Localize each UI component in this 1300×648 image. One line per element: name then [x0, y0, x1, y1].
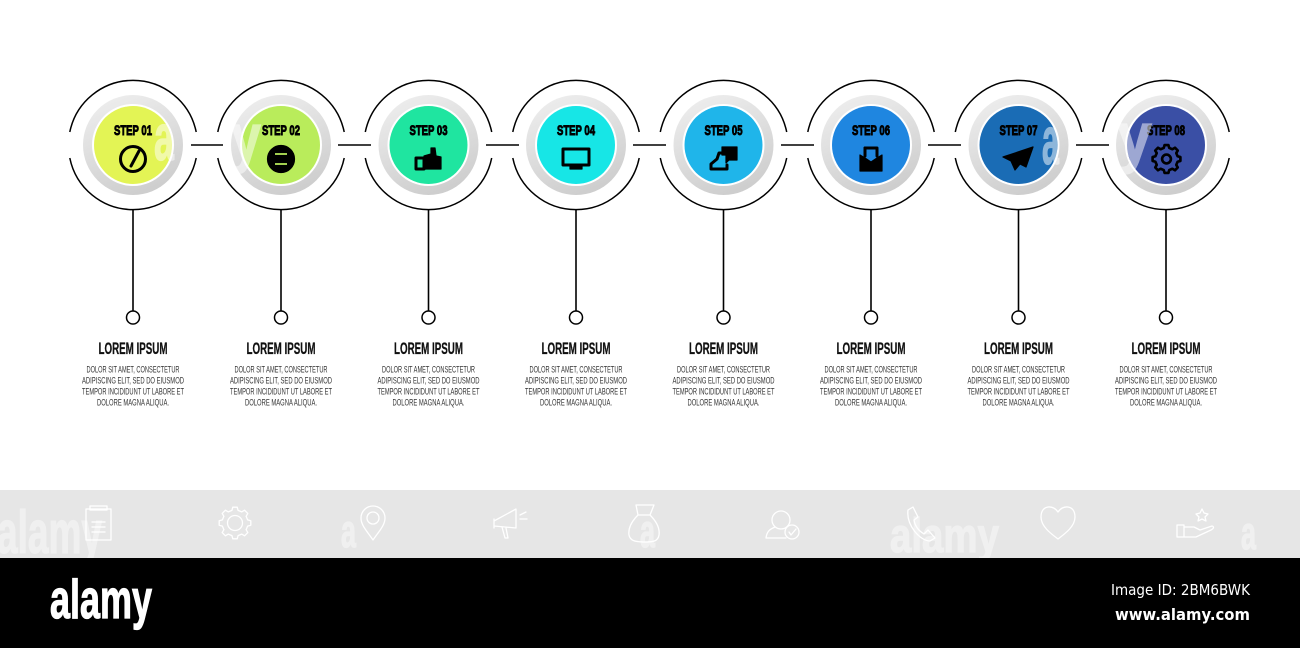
icon: location pin	[361, 506, 385, 540]
step 2	[218, 80, 344, 408]
text 7: TEMPOR INCIDIDUNT UT LABORE ET	[968, 386, 1070, 396]
text 4: ADIPISCING ELIT, SED DO EIUSMOD	[525, 376, 627, 386]
icon: gear	[1153, 145, 1180, 173]
title 5: LOREM IPSUM	[689, 340, 758, 358]
watermark over steps: a	[154, 100, 175, 174]
text 6: DOLORE MAGNA ALIQUA.	[835, 398, 907, 408]
text 3: DOLORE MAGNA ALIQUA.	[392, 398, 464, 408]
icon: user chat	[711, 147, 737, 169]
icon: money bag	[629, 505, 659, 542]
text 1: TEMPOR INCIDIDUNT UT LABORE ET	[82, 386, 184, 396]
band icons	[86, 505, 1214, 542]
text 3	[378, 364, 480, 408]
text 4	[525, 364, 627, 408]
text 7	[968, 364, 1070, 408]
text 1: DOLOR SIT AMET, CONSECTETUR	[86, 364, 180, 374]
text 1: DOLORE MAGNA ALIQUA.	[97, 398, 169, 408]
icon: phone	[908, 507, 935, 541]
icon: thumbs up	[416, 148, 441, 169]
step 5: STEP 05	[704, 122, 743, 138]
website: www.alamy.com	[1115, 605, 1250, 624]
step 8	[1103, 80, 1229, 408]
watermark over steps: y	[1117, 99, 1152, 175]
text 5: DOLORE MAGNA ALIQUA.	[688, 398, 760, 408]
icon: megaphone	[494, 509, 527, 538]
watermark over steps: a	[1042, 103, 1060, 179]
text 2: ADIPISCING ELIT, SED DO EIUSMOD	[230, 376, 332, 386]
text 6: ADIPISCING ELIT, SED DO EIUSMOD	[820, 376, 922, 386]
alamy logo: alamy	[50, 568, 152, 630]
connector lines	[191, 144, 1109, 146]
text 3: DOLOR SIT AMET, CONSECTETUR	[382, 364, 475, 374]
icon: paper plane	[1003, 147, 1033, 170]
step 6	[808, 80, 934, 408]
text 8: ADIPISCING ELIT, SED DO EIUSMOD	[1115, 376, 1217, 386]
text 4: DOLORE MAGNA ALIQUA.	[540, 398, 612, 408]
text 2: TEMPOR INCIDIDUNT UT LABORE ET	[230, 386, 332, 396]
step 7	[955, 80, 1082, 408]
text 5: ADIPISCING ELIT, SED DO EIUSMOD	[672, 376, 775, 386]
icon: user check	[766, 511, 799, 539]
band watermarks: a	[640, 505, 655, 557]
grey icon band	[0, 490, 1300, 558]
title 6: LOREM IPSUM	[836, 340, 906, 358]
band watermarks: alamy	[0, 499, 102, 566]
title 2: LOREM IPSUM	[246, 340, 316, 358]
band watermarks: alamy	[890, 510, 999, 563]
icon: clipboard	[86, 506, 111, 540]
text 1: ADIPISCING ELIT, SED DO EIUSMOD	[82, 376, 184, 386]
step 2: STEP 02	[262, 122, 300, 138]
text 8: DOLOR SIT AMET, CONSECTETUR	[1120, 364, 1213, 374]
text 7: ADIPISCING ELIT, SED DO EIUSMOD	[968, 376, 1070, 386]
text 2: DOLORE MAGNA ALIQUA.	[245, 398, 317, 408]
text 8: DOLORE MAGNA ALIQUA.	[1130, 398, 1202, 408]
icon: monitor	[563, 149, 589, 169]
text 5: DOLOR SIT AMET, CONSECTETUR	[677, 364, 770, 374]
icon: settings gear	[219, 507, 251, 539]
step 3: STEP 03	[410, 122, 448, 138]
icon: globe	[268, 146, 294, 172]
text 5	[672, 364, 775, 408]
text 4: TEMPOR INCIDIDUNT UT LABORE ET	[525, 386, 627, 396]
band watermarks: a	[341, 505, 356, 557]
step 7: STEP 07	[1000, 122, 1038, 138]
title 4: LOREM IPSUM	[542, 340, 610, 358]
step 8: STEP 08	[1147, 122, 1185, 138]
step 6: STEP 06	[852, 122, 890, 138]
text 7: DOLOR SIT AMET, CONSECTETUR	[972, 364, 1065, 374]
text 2: DOLOR SIT AMET, CONSECTETUR	[234, 364, 328, 374]
text 8	[1115, 364, 1217, 408]
step 4: STEP 04	[557, 122, 595, 138]
text 3: TEMPOR INCIDIDUNT UT LABORE ET	[378, 386, 480, 396]
text 8: TEMPOR INCIDIDUNT UT LABORE ET	[1115, 386, 1217, 396]
text 1	[82, 364, 184, 408]
title 8: LOREM IPSUM	[1132, 340, 1200, 358]
text 6: DOLOR SIT AMET, CONSECTETUR	[824, 364, 918, 374]
text 5: TEMPOR INCIDIDUNT UT LABORE ET	[672, 386, 775, 396]
text 7: DOLORE MAGNA ALIQUA.	[982, 398, 1054, 408]
text 6	[820, 364, 922, 408]
image id: Image ID: 2BM6BWK	[1111, 581, 1251, 599]
step 1	[70, 80, 196, 408]
step 3	[365, 80, 492, 408]
text 2	[230, 364, 332, 408]
text 6: TEMPOR INCIDIDUNT UT LABORE ET	[820, 386, 922, 396]
step 4	[513, 80, 639, 408]
watermark over steps	[154, 99, 1152, 179]
watermark over steps: y	[231, 100, 261, 174]
text 3: ADIPISCING ELIT, SED DO EIUSMOD	[378, 376, 480, 386]
icon: inbox	[860, 148, 882, 171]
step 5	[660, 80, 787, 408]
band watermarks: a	[1241, 507, 1256, 559]
title 3: LOREM IPSUM	[394, 340, 463, 358]
step 1: STEP 01	[114, 122, 152, 138]
title 7: LOREM IPSUM	[984, 340, 1053, 358]
icon: hand with star	[1177, 509, 1214, 537]
band watermarks	[0, 499, 1256, 566]
icon: heart	[1041, 507, 1075, 539]
black footer	[0, 558, 1300, 648]
text 4: DOLOR SIT AMET, CONSECTETUR	[530, 364, 623, 374]
title 1: LOREM IPSUM	[98, 340, 168, 358]
icon: clock	[120, 146, 146, 172]
